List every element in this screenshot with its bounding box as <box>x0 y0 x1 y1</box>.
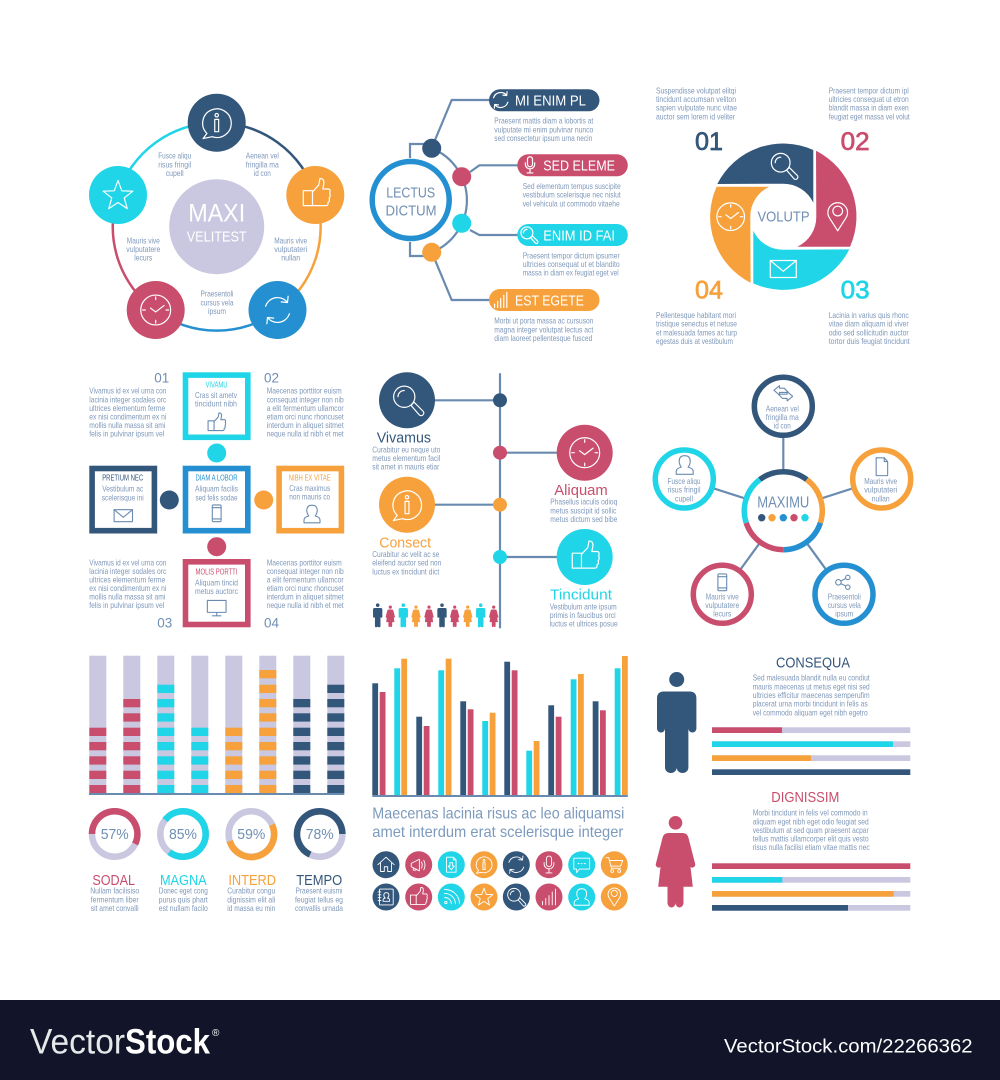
panel: lectus dictum tree <box>372 89 628 343</box>
gauge: 59% <box>229 811 274 857</box>
block: tincidunt: luctus et ultrices posue <box>550 620 618 629</box>
text: consequa: vel commodo aliquam eget nibh egetro <box>753 708 868 717</box>
block: vivamus: metus elementum facil <box>372 454 440 463</box>
text: sed eleme: Sed elementum tempus suscipite <box>523 182 621 191</box>
text: top left: Suspendisse volutpat elitqi <box>656 86 736 95</box>
box: pretium nec: PRETIUM NEC <box>102 474 143 483</box>
icon: envelope <box>770 261 796 277</box>
node: mauris vive right: vulputateri <box>864 486 897 495</box>
block: interd: Curabitur congu <box>227 887 276 896</box>
text: sed eleme: vestibulum scelerisque nec nislut <box>523 191 621 200</box>
text: 02: consequat integer non nib <box>267 395 344 404</box>
progress bars: dignissim <box>712 863 910 911</box>
text: dignissim: Morbi tincidunt in felis vel commodo in <box>753 809 868 818</box>
text: top left note: Fusce aliqu <box>158 152 192 161</box>
text: 02: neque nulla id nibh et met <box>267 429 344 438</box>
block: consect <box>372 535 442 576</box>
box: vivamu: VIVAMU <box>206 380 228 389</box>
block: tincidunt: Vestibulum ante ipsum <box>550 602 617 611</box>
number 02: 02 <box>264 370 279 385</box>
hub: lectus dictum <box>372 162 449 238</box>
block: aliquam <box>550 482 618 524</box>
gauge: 57%: 57% <box>101 826 129 843</box>
panel: five-step cycle <box>89 94 344 339</box>
number 02: 02 <box>841 128 870 156</box>
text: 01: felis in pulvinar ipsum vel <box>89 429 164 438</box>
text: top left <box>656 86 737 121</box>
striped column chart <box>89 656 344 795</box>
text: bottom left: et malesuada fames ac turp <box>656 328 737 337</box>
text: consequa: ultricies efficitur maecenas semperufim <box>753 691 870 700</box>
node: aenean vel: fringilla ma <box>766 413 799 422</box>
center circle: MAXI VELITEST <box>169 179 264 274</box>
text: top right: ultricies consequat ut etron <box>829 95 909 104</box>
block: sodal <box>90 873 140 913</box>
text: bottom left: Pellentesque habitant mori <box>656 311 736 320</box>
block: tempo: Praesent euismi <box>296 887 343 896</box>
node: mauris vive left: lecurs <box>713 610 731 619</box>
pill: sed eleme: SED ELEME <box>543 158 615 175</box>
text: est egete: Morbi ut porta massa ac cursuson <box>494 317 594 326</box>
text: est egete <box>494 317 594 343</box>
block: tempo: convallis urnada <box>295 904 343 913</box>
box: molis portti: Aliquam tincid <box>195 578 238 587</box>
text: top left: sapien vulputate nunc vitae <box>656 104 737 113</box>
block: sodal: SODAL <box>92 873 135 889</box>
block: magna: Donec eget cong <box>159 887 208 896</box>
node: mauris vive right: nullan <box>872 494 890 503</box>
pill: mi enim pl <box>489 89 600 111</box>
icon: thumbs up small <box>405 884 432 910</box>
node: fusce aliqu: risus fringil <box>668 486 701 495</box>
icon: contact book <box>372 884 400 910</box>
node: praesentoli <box>815 565 873 623</box>
block: vivamus <box>372 430 441 472</box>
spokes <box>684 406 882 594</box>
panel: striped columns and gauges <box>89 656 344 913</box>
icon: megaphone <box>405 851 432 878</box>
number 03: 03 <box>157 615 172 630</box>
block: tempo: feugiat tellus eg <box>295 895 343 904</box>
box: molis portti: MOLIS PORTTI <box>196 567 238 576</box>
grouped bar chart <box>372 656 628 797</box>
block: vivamus: sit amet in mauris etiar <box>372 463 440 472</box>
center circle: MAXI VELITEST: VELITEST <box>187 229 247 246</box>
block: interd: dignissim elit ali <box>227 895 275 904</box>
icon: man <box>657 672 696 773</box>
block: tempo <box>295 873 343 913</box>
pill: enim id fai: ENIM ID FAI <box>543 228 615 245</box>
icon: thumbs up <box>286 166 344 224</box>
icon: star <box>89 166 147 224</box>
center circle: MAXI VELITEST: MAXI <box>188 200 245 228</box>
text: bottom right <box>829 311 910 346</box>
block: interd: INTERD <box>228 873 276 889</box>
pinwheel chart <box>710 144 856 290</box>
text: bottom right: Lacinia in varius quis rhonc <box>829 311 909 320</box>
text: 02: etiam orci nunc rhoncuset <box>267 412 344 421</box>
connector dots <box>160 444 273 556</box>
text: bottom left: egestas duis at vestibulum <box>656 337 733 346</box>
box: diam a lobor <box>186 468 248 531</box>
block: consect: luctus ex tincidunt dict <box>372 567 440 576</box>
box: pretium nec: scelerisque ini <box>102 493 144 502</box>
icon: clock <box>717 203 744 230</box>
icon: user <box>568 884 595 910</box>
text: 02: Maecenas porttitor euism <box>267 387 342 396</box>
text: enim id fai <box>523 251 620 278</box>
block: aliquam: Aliquam <box>554 482 608 499</box>
gauge: 78% <box>297 811 342 857</box>
text: bottom left: tristique senectus et netuse <box>656 320 737 329</box>
box: molis portti <box>186 562 248 624</box>
text: top left note <box>158 152 192 178</box>
block: aliquam: metus suscipit id sollic <box>550 506 616 515</box>
icon: woman <box>656 816 695 908</box>
text: dignissim: risus nulla facilisi etiam vitae mattis nec <box>753 843 870 852</box>
text: top right <box>829 86 910 121</box>
text: top left: tincidunt accumsan veliton <box>656 95 736 104</box>
text: left note: Mauris vive <box>127 236 160 245</box>
text: 03: Vivamus id ex vel urna con <box>89 558 167 567</box>
block: consect: Curabitur ac velit ac se <box>372 550 440 559</box>
icon: home <box>372 851 400 878</box>
number 01: 01 <box>695 128 723 156</box>
text: top right: Praesent tempor dictum ipl <box>829 86 909 95</box>
block: magna: purus quis phart <box>159 895 208 904</box>
text: consequa: Sed malesuada blandit nulla eu condiut <box>753 674 870 683</box>
text: 03: ex nisi condimentum ex ni <box>89 584 166 593</box>
text: 03 <box>89 558 167 610</box>
text: 04: neque nulla id nibh et met <box>267 601 344 610</box>
node: mauris vive right: Mauris vive <box>864 477 898 486</box>
text: consequa: placerat urna morbi tincidunt in felis as <box>753 700 868 709</box>
logo: VectorStock <box>30 1022 220 1062</box>
hub: maximu: MAXIMU <box>757 494 809 511</box>
caption text <box>372 805 624 841</box>
text: est egete: magna integer volutpat lectus act <box>494 325 594 334</box>
box: nibh ex vitae: non mauris co <box>289 493 331 502</box>
gauge: 57% <box>92 811 137 857</box>
text: consequa: mauris maecenas ut metus eget nisi sed <box>753 682 870 691</box>
text: mi enim pl: sed consectetur ipsum urna necin <box>494 134 593 143</box>
text: enim id fai: Praesent tempor dictum ipsumer <box>523 251 620 260</box>
text: bottom right: tortor duis feugiat tincidunt <box>829 337 910 346</box>
block: vivamus: Vivamus <box>377 430 431 447</box>
text: right note <box>274 236 308 263</box>
block: aliquam: Phasellus iaculis odioq <box>550 498 618 507</box>
block: consect: Consect <box>379 535 432 552</box>
text: top right note: Aenean vel <box>246 152 279 161</box>
text: top left: auctor sem lorem id veliter <box>656 112 735 121</box>
text: 01: ultrices elementum ferme <box>89 404 166 413</box>
icon: bars <box>536 884 562 910</box>
number 04: 04 <box>264 615 279 630</box>
node: mauris vive left: Mauris vive <box>706 592 739 601</box>
block: tincidunt <box>550 587 618 629</box>
icon: rss <box>438 884 465 910</box>
box: pretium nec <box>92 468 154 531</box>
text: 04 <box>267 558 344 610</box>
node: mauris vive left <box>693 565 751 623</box>
text: 02: interdum in aliquet sitmet <box>267 421 344 430</box>
block: sodal: sit amet convalli <box>91 904 139 913</box>
pill: mi enim pl: MI ENIM PL <box>515 93 586 110</box>
number 04: 04 <box>695 277 723 305</box>
text: 02: a elit fermentum ullamcor <box>267 404 344 413</box>
node: fusce aliqu: Fusce aliqu <box>668 477 701 486</box>
text: bottom right: odio sed sollicitudin auctor <box>829 328 909 337</box>
panel: volutp pinwheel <box>656 86 910 346</box>
block: tempo: TEMPO <box>296 873 342 889</box>
node: aenean vel: id con <box>774 422 791 431</box>
text: mi enim pl: vulputate mi enim pulvinar nunco <box>494 125 594 134</box>
block: sodal: fermentum liber <box>91 895 139 904</box>
icon: location pin <box>828 203 848 231</box>
block: sodal: Nullam facilisiso <box>90 887 140 896</box>
text: top right note: fringilla ma <box>246 160 279 169</box>
text: top right: feugiat eget massa vel volut <box>829 112 910 121</box>
icon: search <box>379 372 435 428</box>
text: consequa <box>753 674 870 717</box>
caption text: amet interdum erat scelerisque integer <box>372 824 624 841</box>
text: 03: felis in pulvinar ipsum vel <box>89 601 164 610</box>
text: 01 <box>89 387 167 438</box>
footer bar <box>0 1000 1000 1080</box>
icon: refresh <box>248 281 306 339</box>
box: vivamu <box>186 375 248 437</box>
pill: enim id fai <box>517 224 628 246</box>
cycle ring <box>113 123 321 331</box>
icon: document download <box>438 851 465 878</box>
block: interd <box>227 873 276 913</box>
block: magna: MAGNA <box>160 873 207 889</box>
timeline spine and branches <box>407 373 585 628</box>
box: diam a lobor: Aliquam facilis <box>195 485 238 494</box>
icon: microphone <box>536 851 562 878</box>
progress bars: consequa <box>712 727 910 775</box>
text: bottom note: cursus vela <box>200 298 234 307</box>
text: mi enim pl <box>494 117 594 143</box>
text: 01: lacinia integer sodales orc <box>89 395 166 404</box>
block: tincidunt: Tincidunt <box>550 587 613 604</box>
panel: cross of boxes <box>89 370 344 630</box>
text: dignissim: vestibulum at sed quam praesent acpar <box>753 826 869 835</box>
node: fusce aliqu <box>655 450 713 508</box>
text: 02 <box>267 387 344 438</box>
text: dignissim: tellus mattis ullamcorper elit quis vesto <box>753 834 869 843</box>
text: left note: vulputatere <box>126 245 161 254</box>
box: nibh ex vitae: Cras maximus <box>289 484 330 493</box>
node: praesentoli: Praesentoli <box>828 592 861 601</box>
text: bottom note: ipsum <box>208 307 226 316</box>
box: diam a lobor: sed felis sodae <box>196 493 238 502</box>
connector dots <box>422 139 471 262</box>
hub: maximu <box>744 472 822 550</box>
people row <box>373 603 498 627</box>
text: right note: nullan <box>281 254 301 263</box>
box: pretium nec: Vestibulum ac <box>102 485 143 494</box>
block: magna <box>159 873 208 913</box>
text: enim id fai: ultricies consequat ut et blandito <box>523 260 620 269</box>
icon: info <box>188 94 246 152</box>
text: 04: a elit fermentum ullamcor <box>267 575 344 584</box>
node: aenean vel <box>754 377 812 435</box>
node: aenean vel: Aenean vel <box>766 404 799 413</box>
box: diam a lobor: DIAM A LOBOR <box>196 474 238 483</box>
logo: VectorStock: Stock <box>125 1022 210 1062</box>
icon: search <box>771 153 798 179</box>
text: 04: Maecenas porttitor euism <box>267 558 342 567</box>
heading: dignissim: DIGNISSIM <box>771 789 839 806</box>
logo: VectorStock: ® <box>212 1028 220 1039</box>
icon: thumbs up <box>557 529 613 585</box>
box: molis portti: metus auctorc <box>195 587 238 596</box>
caption text: Maecenas lacinia risus ac leo aliquamsi <box>372 805 624 822</box>
text: top right: blandit massa in diam exen <box>829 104 909 113</box>
icon: info <box>379 477 435 533</box>
icon: chat <box>568 851 595 878</box>
logo: VectorStock: Vector <box>30 1022 125 1062</box>
block: tincidunt: primis in faucibus orci <box>550 611 616 620</box>
gauge: 78%: 78% <box>306 826 334 843</box>
hub: lectus dictum: DICTUM <box>386 203 436 220</box>
gauge: 85% <box>160 811 206 857</box>
block: vivamus: Curabitur eu neque uto <box>372 445 441 454</box>
number 03: 03 <box>841 277 870 305</box>
text: 01: mollis nulla massa sit ami <box>89 421 165 430</box>
text: dignissim <box>753 809 870 852</box>
hub: lectus dictum: LECTUS <box>386 184 435 201</box>
icon: clock <box>557 425 613 481</box>
text: top right note <box>246 152 279 178</box>
text: right note: Mauris vive <box>274 236 308 245</box>
pill: est egete: EST EGETE <box>515 293 584 310</box>
block: interd: id massa eu min <box>227 904 276 913</box>
icon: clock <box>127 281 185 339</box>
text: enim id fai: massa in diam ex feugiat eget vel <box>523 269 619 278</box>
gauge: 85%: 85% <box>169 826 197 843</box>
text: 04: interdum in aliquet sitmet <box>267 592 344 601</box>
text: 01: ex nisi condimentum ex ni <box>89 412 166 421</box>
node: fusce aliqu: cupell <box>675 494 693 503</box>
text: sed eleme: vel vehicula ut commodo vitaehe <box>523 199 620 208</box>
text: top left note: cupell <box>166 169 184 178</box>
text: bottom note: Praesentoli <box>200 290 234 299</box>
box: vivamu: Cras sit ametv <box>195 391 238 400</box>
text: 03: mollis nulla massa sit ami <box>89 592 165 601</box>
node: praesentoli: cursus vela <box>828 601 861 610</box>
icon grid <box>372 851 628 910</box>
block: aliquam: metus dictum sed bibe <box>550 515 618 524</box>
text: dignissim: aliquam eget nibh eget odio feugiat sed <box>753 817 869 826</box>
block: consect: eleifend auctor sed non <box>372 559 442 568</box>
text: 03: lacinia integer sodales orc <box>89 567 166 576</box>
icon: search small <box>503 884 530 910</box>
node: mauris vive left: vulputatere <box>705 601 740 610</box>
box: nibh ex vitae: NIBH EX VITAE <box>289 474 331 483</box>
icon: refresh small <box>503 851 530 878</box>
box: nibh ex vitae <box>279 468 341 531</box>
number 01: 01 <box>154 370 169 385</box>
text: sed eleme <box>523 182 621 208</box>
icon: cart <box>601 851 628 878</box>
text: 04: consequat integer non nib <box>267 567 344 576</box>
text: top right note: id con <box>254 169 271 178</box>
pill: est egete <box>489 289 600 311</box>
icon: pin small <box>601 884 628 910</box>
text: est egete: diam laoreet pellentesque fusced <box>494 334 593 343</box>
text: left note: lecurs <box>134 254 152 263</box>
text: top left note: risus fringil <box>158 160 191 169</box>
text: 03: ultrices elementum ferme <box>89 575 166 584</box>
panel: maximu hub <box>655 377 911 623</box>
text: 01: Vivamus id ex vel urna con <box>89 387 167 396</box>
block: magna: est nullam facilo <box>159 904 208 913</box>
panel: timeline <box>372 372 618 629</box>
text: left note <box>126 236 161 263</box>
gauge: 59%: 59% <box>237 826 265 843</box>
timeline nodes <box>493 393 507 564</box>
text: mi enim pl: Praesent mattis diam a lobortis at <box>494 117 594 126</box>
pill: sed eleme <box>517 154 628 176</box>
connector lines <box>410 100 518 300</box>
box: vivamu: tincidunt nibh <box>195 399 237 408</box>
text: bottom note <box>200 290 234 316</box>
text: bottom right: vitae diam aliquam id viver <box>829 320 909 329</box>
node: praesentoli: ipsum <box>835 610 853 619</box>
text: bottom left <box>656 311 737 346</box>
node: mauris vive right <box>853 450 911 508</box>
center label: VOLUTP <box>758 209 810 226</box>
icon: info small <box>470 851 498 878</box>
footer url: VectorStock.com/22266362 <box>724 1037 973 1058</box>
icon: star small <box>470 884 498 910</box>
panel: bar chart and icon grid <box>372 656 628 910</box>
panel: demographics <box>656 654 910 911</box>
text: right note: vulputateri <box>274 245 307 254</box>
text: 04: etiam orci nunc rhoncuset <box>267 584 344 593</box>
heading: consequa: CONSEQUA <box>776 654 850 671</box>
